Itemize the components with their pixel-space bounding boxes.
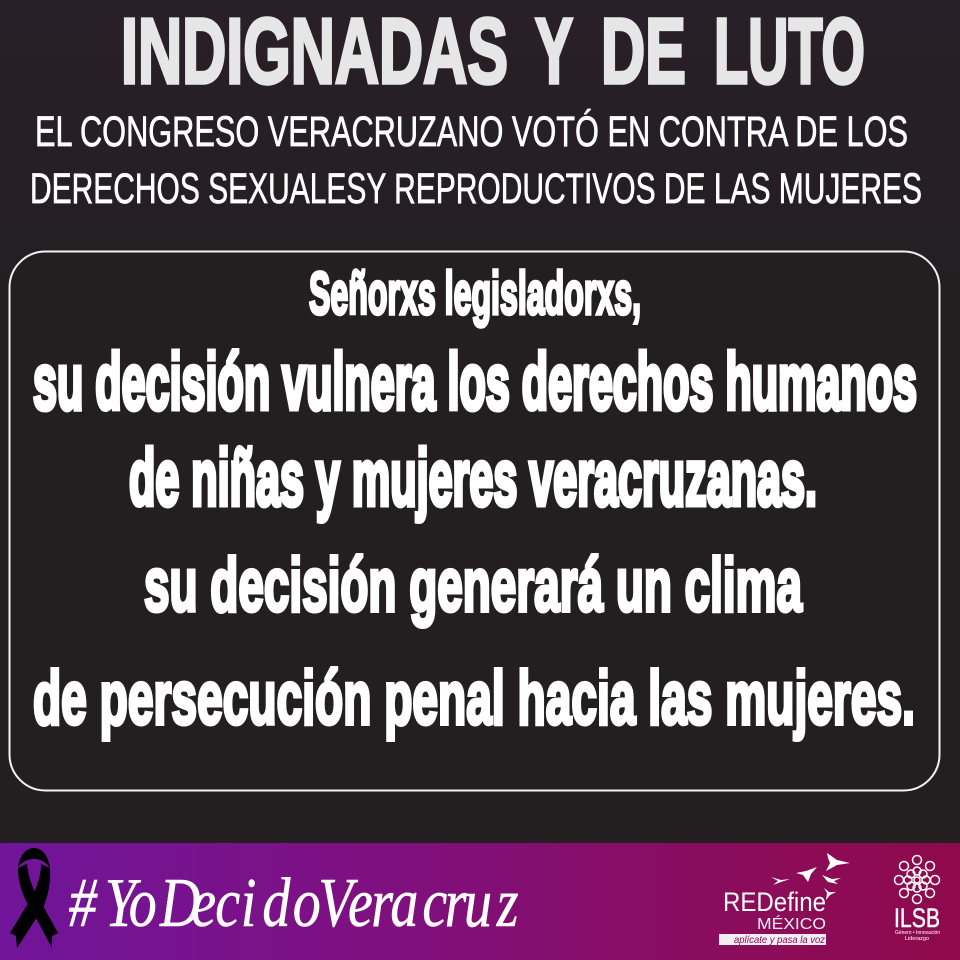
tagline: Liderazgo <box>905 936 929 942</box>
wordmark: ILSB <box>894 903 940 933</box>
logo: REDefine México: aplícate y pasa la voz <box>734 934 826 946</box>
footer band <box>0 843 960 960</box>
logo: REDefine México: MÉXICO <box>757 914 826 933</box>
icon: birds <box>771 853 850 900</box>
hashtag: #YoDecidoVeracruz <box>69 864 519 941</box>
logo: ILSB <box>894 856 940 942</box>
subtitle <box>30 108 922 213</box>
panel outline <box>10 252 940 790</box>
logo: REDefine México <box>719 853 850 946</box>
title: INDIGNADAS <box>121 0 508 103</box>
panel: message <box>10 252 940 790</box>
icon: circle mandala <box>894 856 940 904</box>
message text: Señorxs legisladorxs, <box>309 260 641 327</box>
wordmark: REDefine <box>723 887 826 917</box>
icon: mourning ribbon <box>10 848 58 948</box>
tagline: Género • Innovación <box>895 930 940 936</box>
title: Y <box>535 0 573 103</box>
title: DE <box>601 0 686 103</box>
tagline <box>895 930 940 942</box>
message text <box>33 260 917 741</box>
tagline strip <box>719 934 826 945</box>
